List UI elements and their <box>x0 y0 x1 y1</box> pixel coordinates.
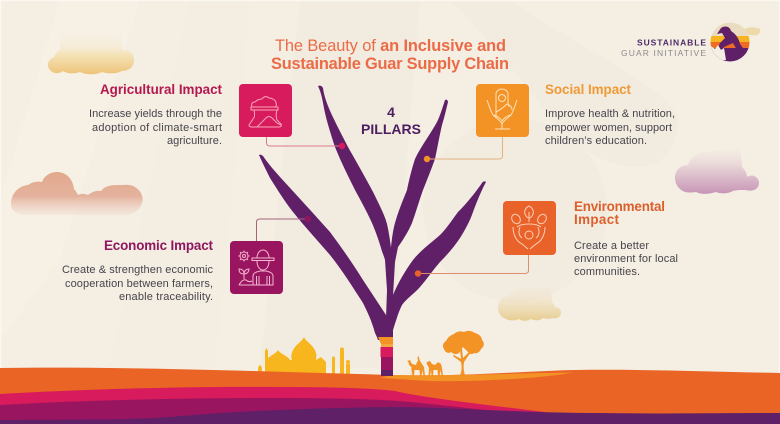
heading: environmental impact: Environmental <box>574 199 665 214</box>
logo: Sustainable Guar Initiative: SUSTAINABLE <box>637 38 706 48</box>
ground: desert bands <box>0 368 780 424</box>
connector: social <box>427 137 502 159</box>
illustration: tree <box>443 331 484 378</box>
text: economic body: cooperation between farmers, <box>65 278 213 290</box>
cloud: yellow lower <box>498 288 561 321</box>
text: environmental body <box>574 240 678 278</box>
panel: social impact text <box>545 82 675 147</box>
icon: grain sack <box>239 84 292 137</box>
cloud: yellow top left <box>48 33 134 74</box>
text: agricultural body: agriculture. <box>167 135 222 147</box>
logo: Sustainable Guar Initiative: GUAR INITIATIVE <box>621 48 706 58</box>
illustration: guar plant <box>259 86 486 376</box>
title <box>271 37 509 73</box>
cloud: mauve right <box>675 147 759 194</box>
panel: environmental impact text <box>574 199 678 278</box>
heading: environmental impact <box>574 199 665 227</box>
stem: coloured bands <box>378 337 393 376</box>
connector: agricultural <box>266 137 342 146</box>
cloud: pink left <box>11 172 143 215</box>
logo: Sustainable Guar Initiative <box>621 22 760 62</box>
text: social body: children’s education. <box>545 135 647 147</box>
panel: agricultural impact text <box>89 82 223 147</box>
text: environmental body: Create a better <box>574 240 649 252</box>
illustration: Taj Mahal <box>258 337 350 378</box>
text: economic body <box>62 264 214 303</box>
text: 4 pillars: 4 <box>387 104 395 120</box>
text: economic body: Create & strengthen economic <box>62 264 214 276</box>
heading: social impact: Social Impact <box>545 82 632 97</box>
panel: economic impact text <box>62 238 214 303</box>
leaf: lower left <box>259 155 393 340</box>
icon: farmer <box>230 241 283 294</box>
text: economic body: enable traceability. <box>119 291 213 303</box>
title: Sustainable Guar Supply Chain <box>271 55 509 73</box>
title: The Beauty of an Inclusive and <box>275 37 506 55</box>
leaf: upper right <box>386 100 448 262</box>
icon: plants and nurturing hands <box>503 201 556 255</box>
icon: woman in caring hands <box>476 84 529 137</box>
text: environmental body: communities. <box>574 266 640 278</box>
heading: environmental impact: Impact <box>574 212 620 227</box>
leaf: upper left <box>318 86 395 320</box>
text: social body: Improve health & nutrition, <box>545 108 675 120</box>
dot: agricultural <box>339 143 345 149</box>
dot: environmental <box>415 270 421 277</box>
text: environmental body: environment for local <box>574 253 678 265</box>
dot: social <box>424 156 430 162</box>
connector: economic <box>256 219 308 241</box>
connector: environmental <box>418 255 528 274</box>
text: agricultural body <box>89 108 222 147</box>
dot: economic <box>305 216 311 222</box>
illustration: camels <box>407 356 443 376</box>
text: 4 pillars: PILLARS <box>361 121 421 137</box>
text: agricultural body: Increase yields through the <box>89 108 222 120</box>
text: social body: empower women, support <box>545 122 672 134</box>
text: 4 pillars <box>361 104 421 137</box>
heading: agricultural impact: Agricultural Impact <box>100 82 223 97</box>
leaf: lower right <box>386 181 486 340</box>
heading: economic impact: Economic Impact <box>104 238 214 253</box>
text: social body <box>545 108 675 147</box>
text: agricultural body: adoption of climate-smart <box>92 122 222 134</box>
